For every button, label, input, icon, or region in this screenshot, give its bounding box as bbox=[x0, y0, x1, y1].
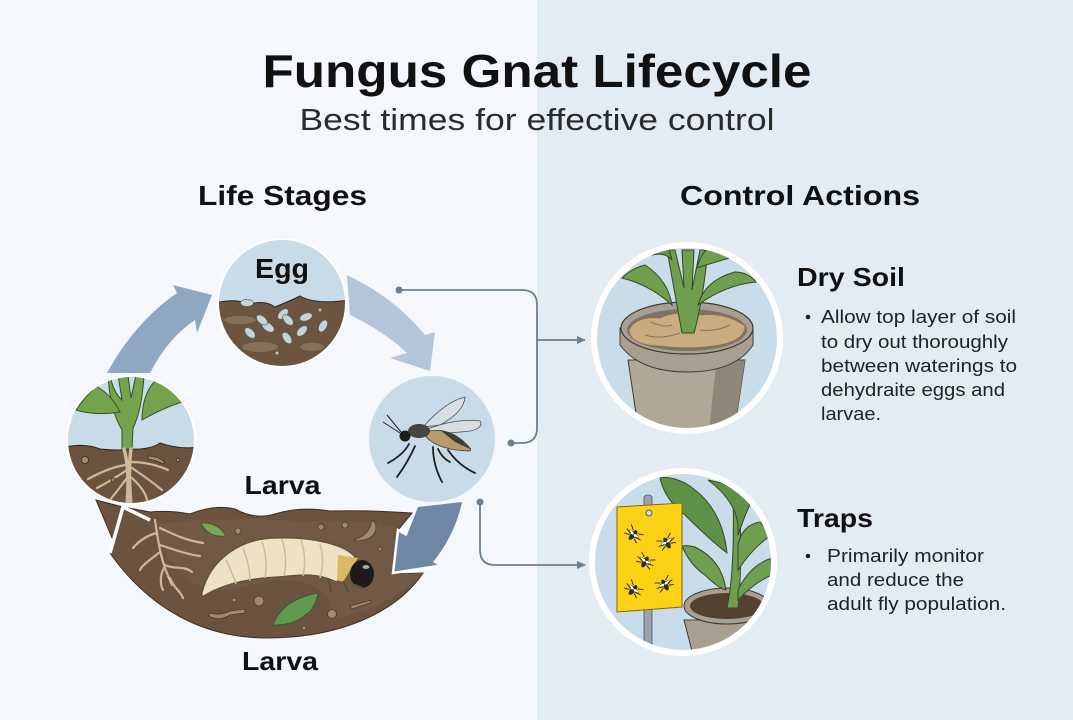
leaves bbox=[201, 523, 226, 536]
text block: traps description: and reduce the bbox=[827, 570, 964, 590]
text block: dry soil description: Allow top layer of soil bbox=[821, 307, 1016, 327]
panel: larva soil bowl bbox=[96, 500, 423, 638]
stage: adult fly bbox=[367, 374, 497, 504]
text block: traps description: Primarily monitor bbox=[827, 546, 984, 566]
icon: larva bbox=[202, 538, 374, 597]
text block: traps description: adult fly population. bbox=[827, 594, 1006, 614]
icon: dry soil pot bbox=[591, 242, 783, 440]
soil bits bbox=[209, 520, 382, 630]
text block: traps description bbox=[806, 546, 1006, 614]
icon: sticky trap and plant bbox=[589, 468, 777, 656]
legs bbox=[329, 580, 362, 592]
label: larva lower: Larva bbox=[242, 646, 319, 676]
white arrowhead outline bbox=[110, 507, 150, 553]
subtitle: Best times for effective control bbox=[300, 102, 774, 137]
connector: stages to dry soil bbox=[396, 286, 585, 446]
stage: seedling bbox=[65, 375, 200, 510]
heading: dry soil: Dry Soil bbox=[797, 262, 905, 292]
background: left panel bbox=[0, 0, 537, 720]
title: Fungus Gnat Lifecycle bbox=[262, 45, 812, 97]
stage: egg bbox=[217, 238, 347, 368]
heading: traps: Traps bbox=[797, 503, 873, 533]
head bbox=[350, 560, 374, 588]
background: right panel bbox=[537, 0, 1073, 720]
text block: dry soil description: larvae. bbox=[821, 404, 881, 424]
heading: control actions: Control Actions bbox=[680, 180, 920, 211]
label: egg: Egg bbox=[255, 253, 309, 284]
text block: dry soil description: dehydraite eggs and bbox=[821, 380, 1005, 400]
roots bbox=[133, 520, 203, 598]
text block: dry soil description: to dry out thoroughly bbox=[821, 332, 1008, 352]
heading: life stages: Life Stages bbox=[198, 180, 367, 211]
connector: adult to traps bbox=[476, 498, 585, 565]
arrow: egg to adult bbox=[347, 275, 435, 371]
arrow: adult to larva bbox=[393, 502, 462, 573]
text block: dry soil description: between waterings to bbox=[821, 356, 1017, 376]
label: larva upper: Larva bbox=[244, 470, 321, 500]
arrow: plant to egg bbox=[107, 285, 212, 373]
text block: dry soil description bbox=[806, 307, 1017, 424]
